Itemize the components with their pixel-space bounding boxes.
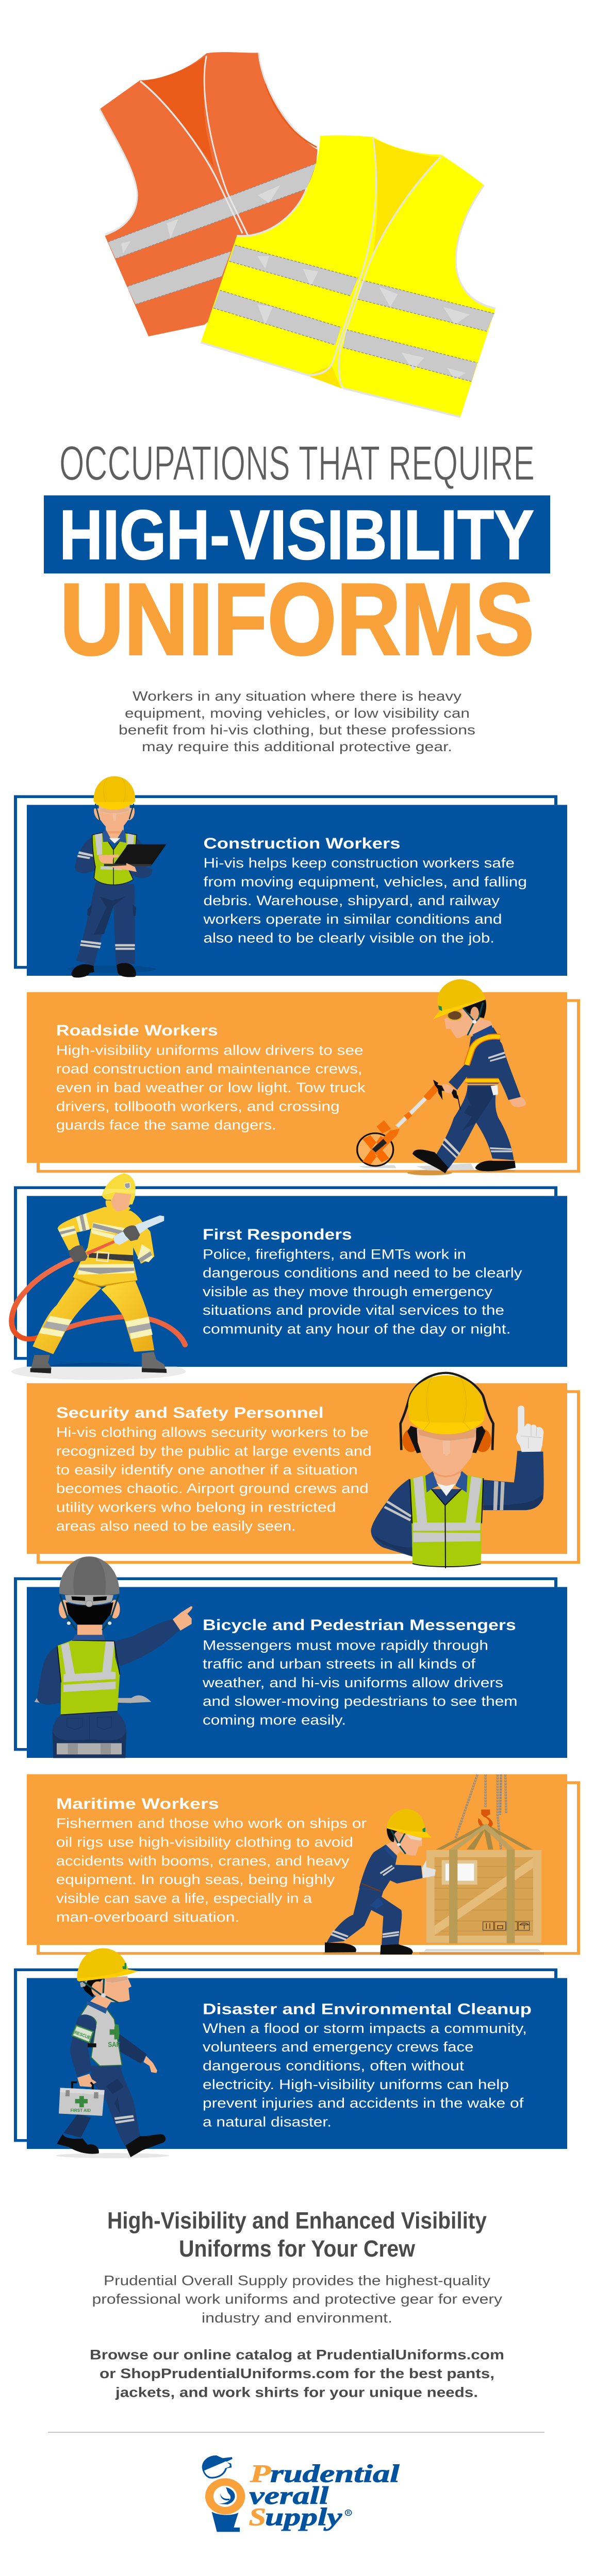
call to action: or ShopPrudentialUniforms.com for the best pants, (100, 2366, 494, 2382)
illustration: rescue worker with first aid kit: RESCUE (73, 2030, 91, 2041)
illustration: safety worker with ear muffs, pointing up (371, 1373, 544, 1568)
panel: roadside workers (27, 979, 579, 1175)
body text: disaster and environmental cleanup (203, 2021, 527, 2130)
body text: bicycle and pedestrian messengers: coming more easily. (203, 1713, 346, 1728)
panel: disaster and environmental cleanup (15, 1948, 567, 2158)
heading: security and safety personnel: Security and Safety Personnel (56, 1403, 324, 1421)
intro paragraph: Workers in any situation where there is heavy (133, 688, 461, 704)
logo: Prudential Overall Supply: rudential (270, 2461, 400, 2488)
body text: construction workers (203, 855, 527, 946)
illustration: construction worker with tablet (68, 776, 167, 977)
body text: maritime workers: Fishermen and those who work on ships or (56, 1816, 367, 1832)
closing paragraph: professional work uniforms and protective gear for every (92, 2292, 503, 2307)
body text: bicycle and pedestrian messengers: weather, and hi-vis uniforms allow drivers (202, 1675, 503, 1691)
closing paragraph (92, 2273, 503, 2326)
body text: bicycle and pedestrian messengers: traffic and urban streets in all kinds of (203, 1656, 475, 1672)
body text: disaster and environmental cleanup: dangerous conditions, often without (203, 2058, 464, 2074)
body text: roadside workers: even in bad weather or low light. Tow truck (56, 1080, 366, 1096)
closing heading: Uniforms for Your Crew (179, 2236, 416, 2262)
logo: Prudential Overall Supply: upply (265, 2504, 342, 2531)
body text: roadside workers: High-visibility uniforms allow drivers to see (56, 1043, 364, 1058)
heading: maritime workers: Maritime Workers (56, 1794, 219, 1812)
body text: security and safety personnel: becomes chaotic. Airport ground crews and (56, 1481, 369, 1497)
body text: security and safety personnel: Hi-vis clothing allows security workers to be (56, 1425, 369, 1440)
body text: maritime workers: equipment. In rough seas, being highly (56, 1872, 335, 1888)
body text: bicycle and pedestrian messengers (202, 1638, 518, 1728)
heading: first responders: First Responders (203, 1225, 352, 1243)
body text: construction workers: debris. Warehouse, shipyard, and railway (204, 893, 500, 909)
body text: maritime workers: visible can save a life, especially in a (56, 1891, 312, 1906)
body text: first responders: visible as they move through emergency (203, 1284, 493, 1300)
body text: disaster and environmental cleanup: volunteers and emergency crews face (203, 2039, 474, 2055)
body text: first responders (203, 1246, 522, 1337)
illustration: maritime worker pushing a hoisted crate (323, 1774, 544, 1955)
panel: construction workers (15, 776, 567, 977)
logo: Prudential Overall Supply: S (249, 2504, 266, 2531)
logo: Prudential Overall Supply: verall (249, 2482, 329, 2510)
body text: security and safety personnel: to easily identify one another if a situation (56, 1462, 358, 1478)
illustration: orange and yellow hi-vis vests (100, 52, 496, 417)
body text: construction workers: workers operate in similar conditions and (203, 911, 502, 927)
body text: construction workers: also need to be clearly visible on the job. (204, 930, 494, 946)
illustration: roadside worker with measuring wheel (357, 979, 526, 1175)
logo: Prudential Overall Supply: P (250, 2461, 271, 2488)
body text: security and safety personnel (56, 1425, 372, 1534)
body text: security and safety personnel: utility workers who belong in restricted (56, 1500, 336, 1515)
panel: security and safety personnel (27, 1373, 579, 1568)
call to action: Browse our online catalog at PrudentialUniforms.com (90, 2347, 504, 2363)
body text: roadside workers: drivers, tollbooth workers, and crossing (56, 1099, 340, 1114)
body text: disaster and environmental cleanup: electricity. High-visibility uniforms can help (203, 2077, 509, 2092)
intro paragraph (119, 688, 475, 754)
body text: bicycle and pedestrian messengers: Messengers must move rapidly through (203, 1638, 488, 1653)
heading: construction workers: Construction Workers (204, 834, 401, 852)
heading: roadside workers: Roadside Workers (56, 1022, 218, 1039)
closing heading (107, 2208, 487, 2262)
body text: maritime workers: man-overboard situation. (56, 1909, 239, 1925)
body text: first responders: situations and provide vital services to the (203, 1302, 504, 1318)
body text: bicycle and pedestrian messengers: and slower-moving pedestrians to see them (203, 1693, 518, 1709)
call to action: jackets, and work shirts for your unique needs. (115, 2384, 478, 2400)
panel: bicycle and pedestrian messengers (15, 1556, 567, 1758)
logo: Prudential Overall Supply: R (347, 2511, 350, 2515)
body text: disaster and environmental cleanup: a natural disaster. (203, 2114, 332, 2130)
body text: roadside workers (56, 1043, 366, 1133)
body text: security and safety personnel: areas also need to be easily seen. (56, 1518, 296, 1534)
body text: disaster and environmental cleanup: When a flood or storm impacts a community, (203, 2021, 527, 2037)
illustration: firefighter with hose (11, 1173, 186, 1380)
body text: construction workers: Hi-vis helps keep construction workers safe (204, 855, 515, 871)
intro paragraph: may require this additional protective gear. (142, 739, 452, 754)
closing paragraph: Prudential Overall Supply provides the highest-quality (104, 2273, 491, 2289)
body text: disaster and environmental cleanup: prevent injuries and accidents in the wake of (203, 2095, 523, 2111)
body text: maritime workers: accidents with booms, cranes, and heavy (56, 1853, 350, 1869)
body text: maritime workers (56, 1816, 367, 1925)
closing paragraph: industry and environment. (202, 2310, 392, 2326)
panel: maritime workers (27, 1774, 579, 1955)
closing heading: High-Visibility and Enhanced Visibility (107, 2208, 487, 2234)
body text: roadside workers: road construction and maintenance crews, (56, 1061, 362, 1077)
logo: Prudential Overall Supply (202, 2455, 400, 2532)
illustration: messenger pointing, seen from behind (35, 1556, 192, 1758)
body text: maritime workers: oil rigs use high-visibility clothing to avoid (56, 1835, 353, 1850)
body text: construction workers: from moving equipment, vehicles, and falling (204, 874, 527, 890)
illustration: rescue worker with first aid kit: FIRST AID (71, 2108, 91, 2113)
intro paragraph: equipment, moving vehicles, or low visibility can (125, 705, 470, 720)
call to action (90, 2347, 504, 2400)
heading: bicycle and pedestrian messengers: Bicycle and Pedestrian Messengers (203, 1616, 516, 1634)
body text: security and safety personnel: recognized by the public at large events and (56, 1444, 372, 1459)
intro paragraph: benefit from hi-vis clothing, but these professions (119, 722, 475, 737)
illustration: rescue worker with first aid kit: SAF (108, 2041, 120, 2049)
body text: first responders: dangerous conditions and need to be clearly (203, 1265, 522, 1281)
icon: worker mascot (202, 2455, 241, 2532)
body text: first responders: Police, firefighters, and EMTs work in (203, 1246, 466, 1262)
illustration: rescue worker with first aid kit (56, 1948, 169, 2158)
panel: first responders (11, 1173, 567, 1380)
body text: first responders: community at any hour of the day or night. (203, 1321, 511, 1337)
heading: disaster and environmental cleanup: Disaster and Environmental Cleanup (203, 2000, 532, 2018)
body text: roadside workers: guards face the same dangers. (56, 1117, 276, 1133)
